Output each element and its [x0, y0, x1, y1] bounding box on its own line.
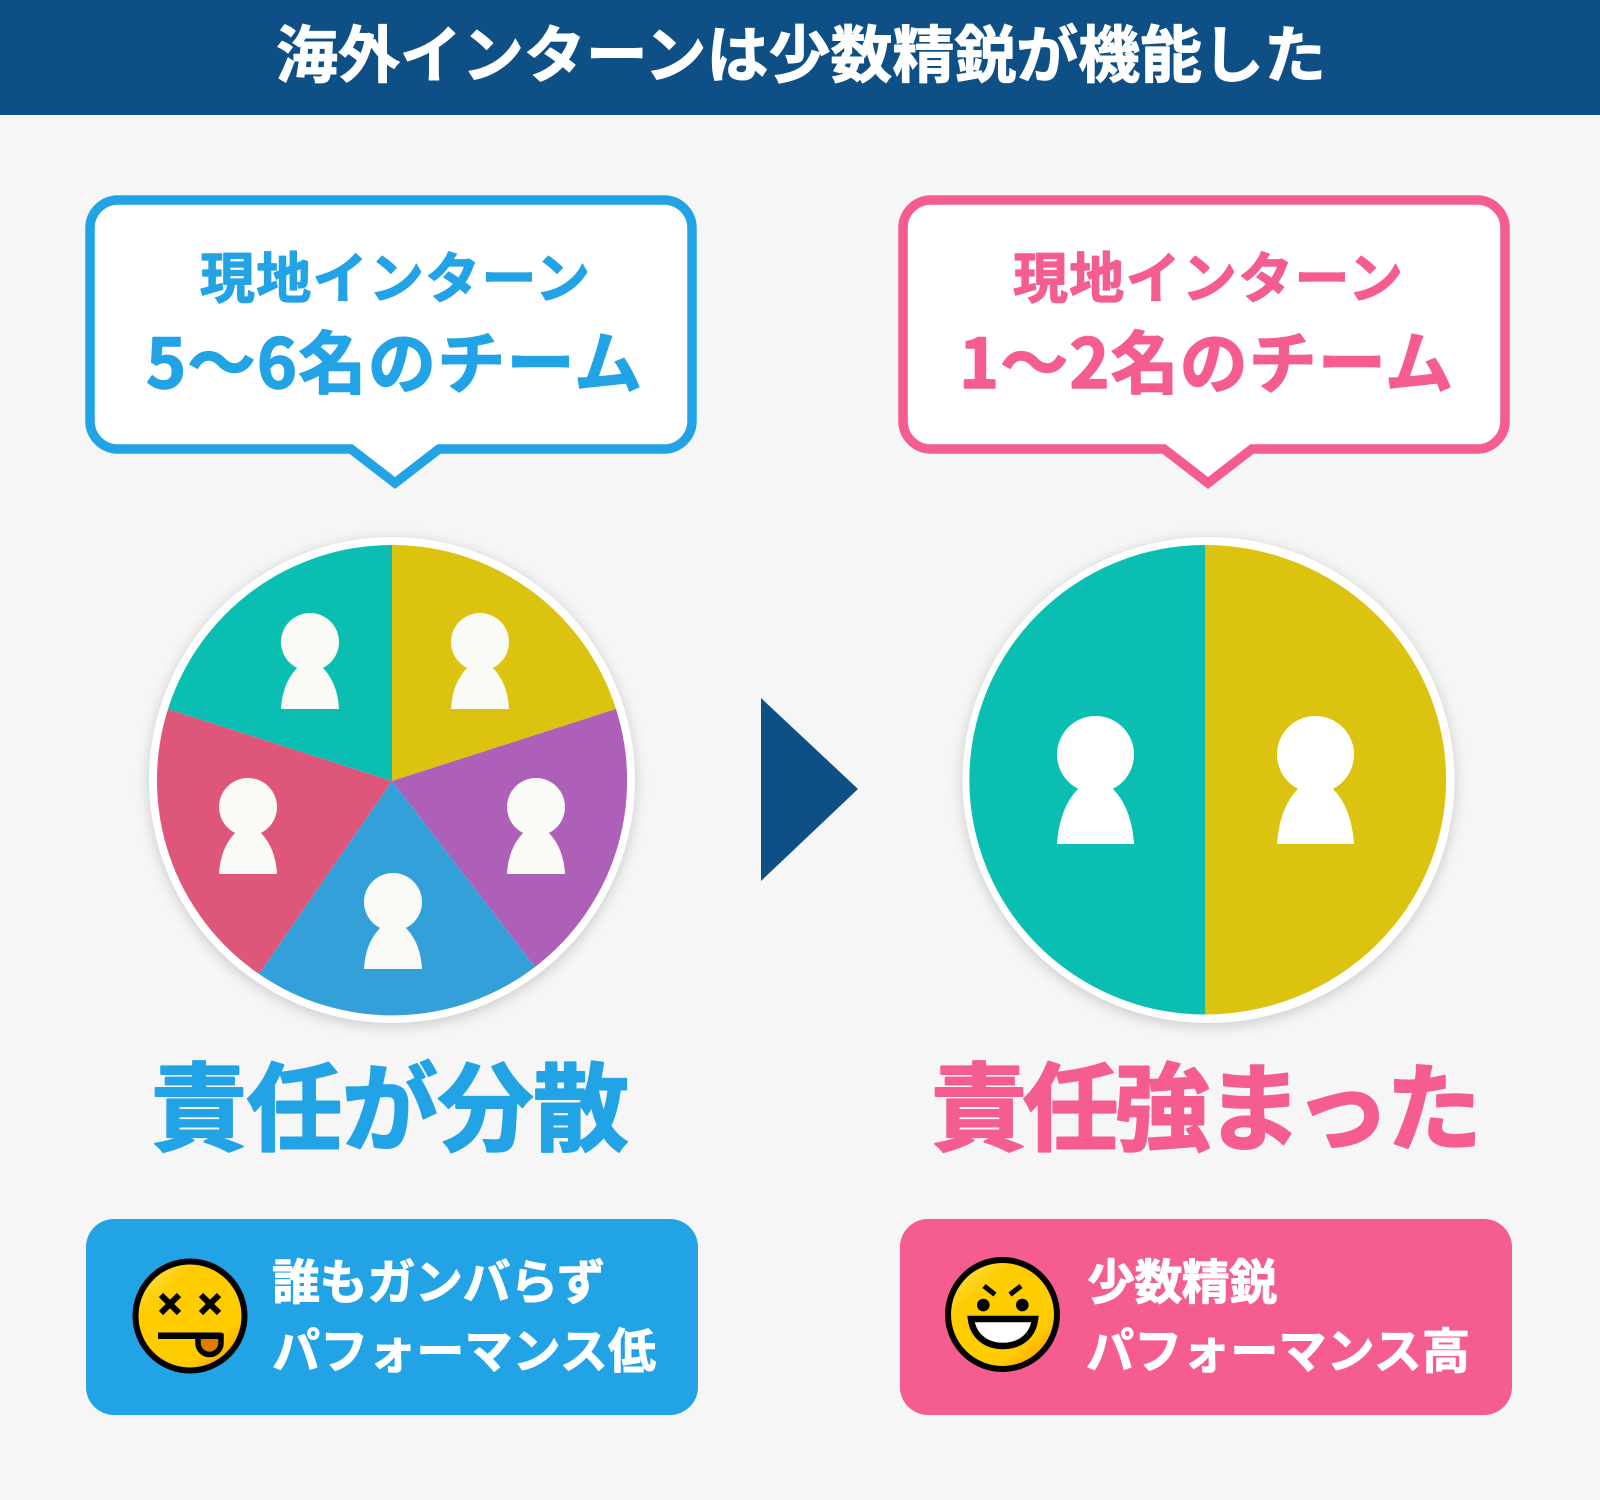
panel: high performance: 少数精鋭	[1087, 1243, 1277, 1313]
speech bubble: 1-2 member team: 現地インターン	[1013, 234, 1403, 314]
icon: grinning face	[948, 1260, 1057, 1369]
person icon: blue segment	[364, 873, 422, 969]
person icon: teal segment	[281, 613, 339, 709]
person icon: yellow half	[1277, 716, 1354, 844]
person icon: yellow segment	[451, 613, 509, 709]
person icon: red segment	[219, 778, 277, 874]
panel: high performance	[900, 1219, 1512, 1415]
speech bubble: 5-6 member team	[90, 200, 692, 483]
panel: high performance: パフォーマンス高	[1086, 1312, 1470, 1382]
person icon: teal half	[1057, 716, 1134, 844]
speech bubble: 5-6 member team: 5〜6名のチーム	[146, 309, 642, 408]
speech bubble: 1-2 member team: 1〜2名のチーム	[959, 309, 1453, 408]
person icon: purple segment	[507, 778, 565, 874]
speech bubble: 1-2 member team	[903, 200, 1505, 483]
panel: low performance: 誰もガンバらず	[272, 1243, 605, 1313]
heading: responsibility strengthened: 責任強まった	[931, 1032, 1482, 1171]
panel: low performance	[86, 1219, 698, 1415]
pie chart: two members	[962, 537, 1454, 1023]
speech bubble: 5-6 member team: 現地インターン	[200, 234, 590, 314]
panel: low performance: パフォーマンス低	[272, 1312, 656, 1382]
heading: responsibility dispersed: 責任が分散	[151, 1032, 629, 1171]
icon: dizzy face	[136, 1262, 244, 1370]
arrow	[761, 698, 858, 881]
title banner: 海外インターンは少数精鋭が機能した	[276, 5, 1326, 95]
pie chart: five members	[149, 537, 635, 1023]
title banner	[0, 0, 1600, 115]
